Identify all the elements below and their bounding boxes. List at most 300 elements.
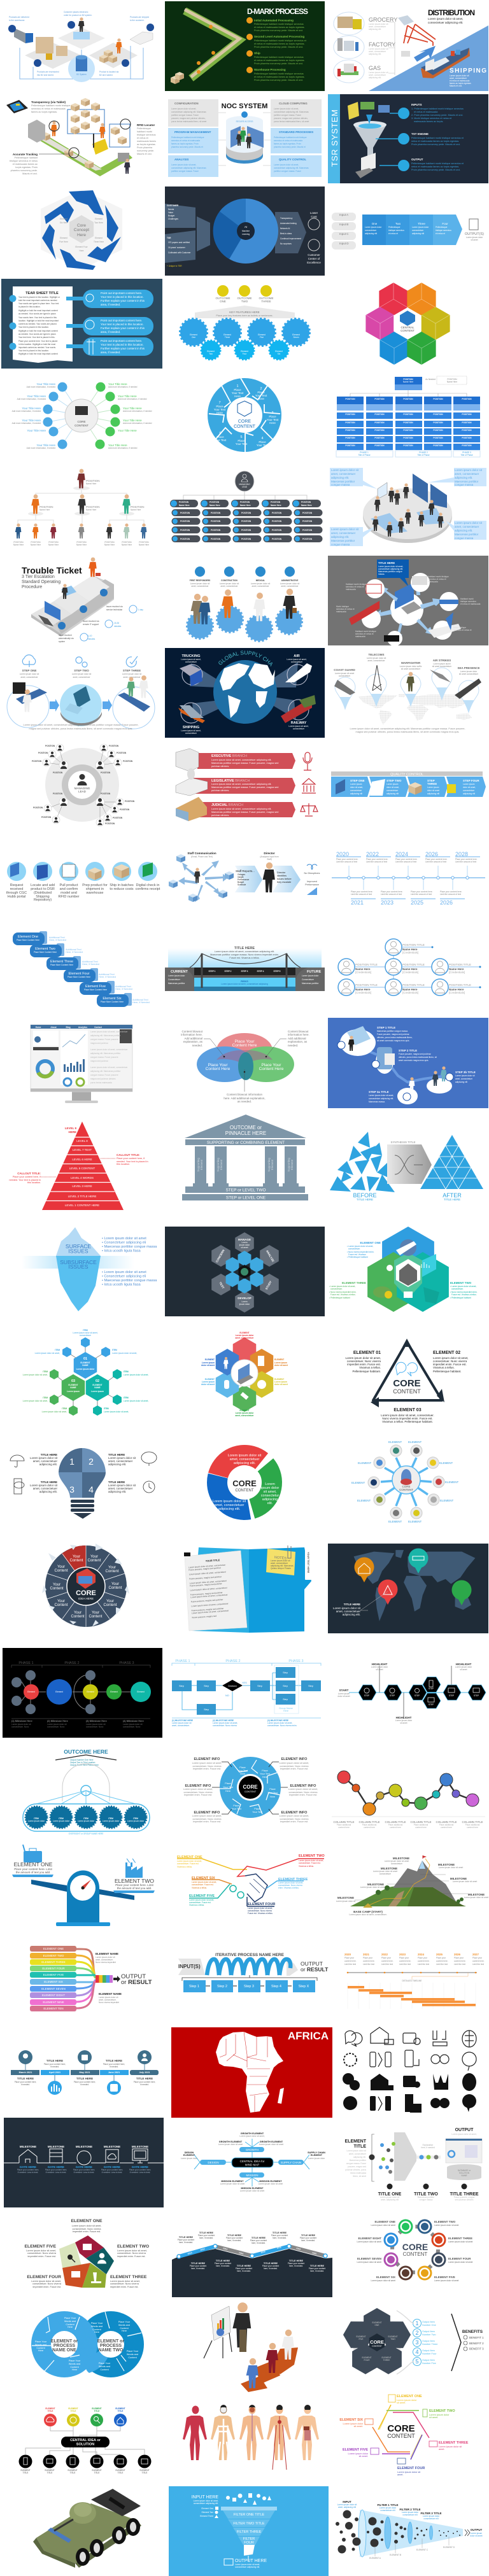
panel: element info ring: Lorem ipsum dolor sit amet, [183,1788,213,1791]
labels: ELEMENT FOUR [397,2467,425,2470]
panel: filter cone: Lorem ipsum [471,2532,483,2535]
panel: distribution: GAS [369,65,381,71]
panel: connected vehicles: senectus et netus et [428,578,446,581]
panel: element info ring: Here [240,1773,245,1775]
panel: tear sheet: Your words are typed in place here. Your text [18,302,59,305]
panel: balance scale: Place your content here. Limit [14,1868,53,1871]
labels: dolor sit amet [274,1364,288,1367]
panel: handshake: Vivamus a tellus. [299,1865,314,1868]
panel: iterative process: Step 2 [217,1985,227,1988]
panel: seven step cycle: 5 [240,435,243,439]
panel: bridge: CURRENT [171,970,188,974]
panel: central idea tree: ELEMENT [20,2469,31,2472]
panel: radial elements [351,1440,459,1523]
panel: inputs to outputs: tristique senectus [436,229,451,232]
panel: icon set [343,2027,476,2113]
panel: control room: Lorem ipsum dolor sit [455,521,483,524]
panel: blue funnel: OUTPUT HERE [235,2559,267,2563]
labels: Lorem ipsum [202,1381,215,1383]
panel: gantt timeline: 2027 [472,1953,479,1956]
panel: six step product flow: and confirm [60,887,78,891]
panel: hexagon elements: • Nunc viverra imperdiet enim. [329,1291,357,1293]
panel: element filter to output: DATABASE or [458,2169,471,2172]
panel: AI machine learning: Network AI [280,227,290,230]
panel: handshake: Vivamus a tellus. [189,1904,204,1906]
panel: core wheel: Content [69,1559,83,1563]
panel: pentagon elements: consectetuer. Nunc viverra [27,2252,57,2255]
callout text: pharetra nonummy pede. [11,169,38,172]
panel: dark milestones: Place your content here, [45,2169,67,2171]
labels: Lorem ipsum dolor [397,2399,417,2402]
panel: column circles path: COLUMN TITLE [334,1820,354,1824]
panel: phase org chart: Title of Phase [358,454,371,456]
step text: STEP 3a TITLE [369,1090,389,1094]
panel: element info ring: imperdiet enim. Fusce est. [280,1820,308,1823]
panel: inputs to outputs: Three [418,222,425,225]
panel: six stepped pills: Place More Content Here [84,989,107,991]
panel: element info ring: Here [270,1796,275,1798]
panel: inputs to outputs: Input A [339,213,348,216]
panel: outcome gears: Output Number One Here [70,1759,94,1761]
panel: star benefits: 5 [415,2358,419,2365]
panel: hex tree: Lorem ipsum dolor sit amet, [112,1352,137,1355]
centre hex [393,307,422,339]
levels: LEVEL 1 CONTENT HERE [65,1204,99,1207]
panel: trouble ticket: remote IT support [83,623,99,626]
panel: mountain milestones: Lorem ipsum dolor sit amet [453,1880,477,1883]
panel: phase org chart: POSITION [345,444,355,447]
panel: pill org chart: POSITION [271,501,281,503]
panel: pill org chart: POSITION [180,529,190,531]
panel: three step care: Lorem ipsum dolor sit [122,673,141,675]
panel: element info ring: Lorem ipsum dolor sit amet, [288,1788,318,1791]
cones [190,662,298,721]
colored nodes [24,1684,39,1700]
panel: six stepped pills: Here, If Needed [132,1001,150,1004]
panel: gantt timeline: 2021 [363,1953,370,1956]
panel: gears and outcomes: Element [292,334,300,336]
panel: blue funnel: FILTER ONE TITLE [234,2513,265,2517]
panel: six step product flow: warehouse [86,891,103,895]
panel: people org chart: POSITION [48,541,59,544]
panel: element filter to output [345,2128,482,2201]
panel: pill org chart: Name Here [179,504,190,507]
panel: NOC system: pharetra nonummy pede. Mauris et [171,146,203,148]
panel: core wheel: Your [53,1583,60,1587]
panel: bridge: Fusce est. Vivamus a tellus. [229,957,260,959]
panel: star benefits: ELEMENT [362,2356,372,2359]
panel: tear sheet: TEAR SHEET TITLE [25,292,59,295]
panel: hexagon elements: consectetuer. [330,1288,343,1290]
panel: mind map: ELEMENT [183,2154,195,2157]
panel: ten elements to output: Nunc viverra imperdiet [99,2001,119,2004]
panel: six step product flow: shipment in [86,887,104,891]
panel: blue steps: consectetuer adipiscing elit. [369,1097,393,1100]
panel: phase org chart: POSITION [433,437,443,439]
panel: tear sheet: as needed. Your words are typed in place. [18,333,56,335]
info labels [185,1757,316,1815]
panel: inputs to outputs: consectetuer [412,229,424,232]
panel: responders: Lorem ipsum dolor sit [251,582,270,585]
panel: core wheel: Your [90,1555,98,1559]
labels: OUTPUT [471,2528,483,2531]
panel: iterative process: Step 4 [271,1985,281,1988]
solid icons [343,2073,476,2113]
labels: ELEMENT FOUR [248,1903,275,1906]
spring coils [207,1959,290,1975]
panel: distribution: Lorem ipsum dolor sit [369,23,388,25]
labels: Lorem ipsum [274,1362,287,1364]
panel: staff communication: Schedule [237,883,246,886]
panel: tear sheet: important content as needed. Your words. [18,346,56,349]
phases [336,451,480,457]
core label: CONTENT [234,425,256,429]
panel: element info ring: Your Text [267,1792,278,1794]
panel: inputs to outputs: consectetuer [365,229,377,232]
panel: managing lead network: POSITION [113,817,123,819]
panel: gantt timeline: content here. [363,1960,375,1962]
labels [201,1332,288,1417]
panel: control room: Maecenas porttitor [331,480,355,483]
panel: hexagon strategy: MANAGE [238,1238,251,1241]
panel: dark milestones: Place your content here, [17,2169,39,2171]
panel: pentagon elements: consectetuer. Nunc viverra [117,2252,146,2255]
panel: central idea tree: ELEMENT [92,2407,102,2410]
element labels: ELEMENT EIGHT [358,2237,381,2240]
panel: process flow: consectetuer. Nunc viverra enim. [267,1724,297,1727]
panel: world pins: AIR STRIKES [433,659,451,662]
panel: pill org chart: POSITION [241,529,252,531]
labels: ELEMENT [239,1409,250,1412]
labels [177,1854,325,1906]
panel: pentagon elements: Lorem ipsum dolor sit amet, [26,2249,56,2252]
panel: month timeline: TITLE HERE [136,2077,153,2080]
panel: black phase diagram: PHASE 1 [18,1661,34,1665]
panel: element filter to output: Lorem ipsum dolor sit [347,2150,366,2152]
labels: ELEMENT TWO [115,1878,154,1884]
panel: pyramid: Place your content here, if [13,1176,41,1178]
panel: mountain timeline: here, if needed. [191,2267,205,2270]
panel: infinity process: Content [70,2366,80,2368]
AI wheel: Machine [242,230,250,232]
panel: gantt timeline: Place your [344,1957,355,1959]
panel: phase org chart: PHASE 3 [462,451,471,454]
panel: NOC system: Lorem ipsum dolor sit amet, [274,164,299,166]
panel: people org chart: POSITION [139,541,149,544]
panel: zig timeline: Place your content here. [336,858,358,861]
panel: star benefits: Output Item [422,2349,435,2352]
panel: month timeline: Place your content here, [44,2063,66,2066]
panel: folder: Lorem ipsum dolor sit [271,1559,290,1562]
panel: mountain timeline: here, if needed. [227,2239,241,2242]
panel: six stepped pills: Element Two [35,947,55,951]
panel: handshake: Lorem ipsum dolor sit amet, [278,1882,303,1884]
panel: element filter to output: Lorem ipsum dolor sit amet, [451,2133,477,2136]
panel: dark world map: Lorem ipsum dolor sit [333,1607,361,1610]
panel: process flow: PHASE 3 [288,1659,304,1663]
section headings [411,103,429,161]
info labels: ELEMENT INFO [185,1784,211,1788]
panel: TSR system: Pellentesque habitant morbi tristique senectus et [411,137,464,139]
panel: hexagon strategy [165,1227,325,1316]
panel: six stepped pills: Element Five [85,985,106,989]
panel: puzzle bulb: Lorem ipsum dolor sit [30,1456,58,1460]
panel: temple: Supporting [197,1158,200,1172]
panel: AI machine learning: CUSTOMER [167,204,179,207]
arrows star [178,861,228,902]
panel: black hex path: HIGHLIGHT [372,1663,388,1666]
panel: distribution: Lorem ipsum dolor sit [369,71,388,74]
process steps: et netus et malesuada fames ac turpis egestas. [254,76,305,78]
panel: gantt timeline: Place your [436,1957,446,1959]
panel: connected vehicles: malesuada [355,635,365,638]
panel: column circles path: content here [364,1826,375,1829]
panel: six step product flow: Hubb portal [8,895,25,899]
panel: circular org members: [Credentials] [355,991,371,994]
panel: blue funnel: Element Two [202,2511,213,2514]
panel: inputs to outputs: Lorem ipsum dolor [412,226,429,229]
panel: hexagon elements: • Nunc viverra imperdiet enim. [450,1291,478,1293]
panel: NOC system: porttitor congue massa. Fusce [171,114,199,116]
panel: element info ring: imperdiet enim. Fusce est. [280,1768,308,1770]
panel: tear sheet: Point out important content here. [101,292,142,295]
panel: month timeline: TITLE HERE [17,2077,34,2080]
panel: core wheel: Content [89,1615,103,1619]
panel: triangle cycle: Pellentesque habitant. [433,1370,462,1373]
panel: dashboard monitor: adipiscing elit. Maecenas porttitor [90,1052,121,1055]
buildings [176,749,208,821]
panel: trouble ticket: 1-10 [88,635,92,637]
panel: venn diagram: information here. [288,1033,309,1036]
process steps: Proin pharetra nonummy pede. Mauris et orci. [254,46,303,48]
panel: gantt timeline: 2023 [399,1953,406,1956]
labels: FILTER 1 TITLE [378,2503,398,2507]
panel: black hex path: HIGHLIGHT [396,1716,412,1719]
panel: infinity process: Place Your [118,2321,131,2323]
panel: element filter to output: lectus malesuada [350,2172,366,2174]
panel: tear sheet: Your text is placed in this location. [101,323,144,326]
panel: folder: adipiscing elit. Maecenas [271,1565,294,1567]
panel: mountain timeline: here, if needed. [301,2239,315,2242]
panel: balance scale: the amount of text you add. [16,1871,50,1874]
panel: world pins: consectetuer [339,675,351,677]
panel: core wheel: Your [73,1555,80,1559]
panel: element filter to output: SOLUTION [459,2172,470,2174]
labels: Lorem ipsum dolor [348,2453,369,2455]
panel: distribution: et netus et malesuada [450,80,470,82]
panel: infinity process: Place Your [99,2362,111,2365]
panel: pill org chart: POSITION [211,538,221,540]
panel: central idea tree: ELEMENT [115,2469,125,2472]
panel: temple [182,1115,308,1200]
panel: inputs to outputs: Input B [339,223,348,226]
panel: pentagon elements: imperdiet enim. Fusce est. [110,2286,139,2288]
panel: control room: amet, consectetuer [455,525,479,528]
process steps: et netus et malesuada fames ac turpis egestas. [254,43,305,45]
panel: folder: YOUR TITLE [206,1559,220,1563]
panel: circular org members: Name Here [402,988,418,991]
panel: core concept hexagonal cycle: Six Here [60,222,67,224]
step captions [9,11,149,76]
panel: hexagon elements [329,1227,478,1312]
panel: gears and outcomes: Element [241,350,248,353]
panel: mind map: CENTRAL IDEA for [240,2160,265,2163]
milestones: MILESTONE [438,1863,455,1866]
panel: tear sheet: Point out important content here. [101,319,142,322]
callout text: Proin pharetra [137,146,153,149]
labels: CORE [387,2423,415,2434]
panel: infinity process [31,2311,144,2377]
particles [336,2510,460,2554]
panel: element info ring: Your Text [237,1770,248,1772]
panel: hexagon elements: • Lorem ipsum dolor sit amet, [329,1285,355,1288]
panel: hub with twelve items: Add more information, if needed [12,410,41,412]
panel: eight element ring: CONTENT [403,2251,427,2257]
panel: handshake: Lorem ipsum dolor sit amet, [189,1899,214,1901]
vehicles [362,573,458,646]
panel: inputs to outputs: Pellentesque [436,226,448,229]
panel: tear sheet: area, if needed. [101,303,120,306]
panel: phase org chart: POSITION [403,437,413,439]
output [224,2559,233,2565]
panel: world pins: Lorem ipsum dolor [460,670,478,673]
panel: phase org chart: POSITION [374,398,385,400]
panel: zig timeline: 2021 [351,899,364,906]
element labels: NAME TWO [99,2348,124,2353]
panel: gantt timeline [344,1953,485,2009]
panel: quality control: adipiscing elit [463,792,475,795]
panel: mind map: MISSION [246,2174,259,2177]
panel: hub with twelve items: Add more information, if needed [108,386,138,388]
process steps: et netus et malesuada fames ac turpis egestas. [254,59,305,62]
columns [337,397,480,404]
panel: gantt timeline: 2026 [454,1953,461,1956]
panel: pentagon elements: consectetuer. Nunc viverra [73,2228,101,2230]
title: Trouble Ticket [22,565,82,575]
panel: managing lead network: POSITION [32,760,42,763]
panel: element info ring: consectetuer. Nunc viverra [193,1818,222,1820]
step captions: B2 System [76,73,87,76]
database icon [68,55,95,82]
panel: star benefits: FIVE [358,2338,364,2340]
process steps: Proin pharetra nonummy pede. Mauris et orci. [254,62,303,65]
panel: three branches: Lorem ipsum dolor sit amet, consectetuer adipiscing elit. [211,759,272,761]
panel: venn diagram: explanation, as [183,1040,203,1043]
step captions: Products are delivered [9,16,29,18]
panel: hex tree: Lorem ipsum dolor sit amet, [23,1400,48,1402]
panel: hexagon elements: • Lorem ipsum dolor sit amet, [347,1245,373,1248]
labels [343,2500,483,2531]
panel: global supply chain: consectetuer [291,661,303,663]
panel: mountain milestones: Lorem ipsum dolor sit amet [360,1886,385,1889]
panel: month timeline: if needed. [140,2083,149,2086]
panel: phase org chart: POSITION [433,429,443,432]
core: CONTENT [236,1489,254,1493]
panel: month timeline: Place your content here, [134,2081,155,2083]
below water [56,1256,101,1311]
panel: puzzle bulb: amet, consectetuer [108,1487,133,1490]
panel: venn diagram: Add additional [288,1037,306,1040]
panel: NOC system: Lorem ipsum dolor sit amet, [171,164,196,166]
panel: phase org chart: POSITION [462,398,472,400]
panel: phase org chart: POSITION [403,398,413,400]
panel: venn diagram: Content blowout [288,1030,309,1033]
panel: gantt timeline: Limit the text [399,1963,411,1966]
circles [7,686,49,728]
panel: dashboard monitor: Contact [94,1026,103,1029]
core label [234,401,256,429]
panel: dark milestones: MILESTONE [20,2145,36,2148]
panel: process flow: Decision [228,1685,237,1687]
panel: gantt timeline: Limit the text [381,1963,393,1966]
panel: managing lead network: POSITION [38,752,48,754]
panel: world pins: Lorem ipsum dolor sit [367,657,386,659]
panel: hub with twelve items: Add more information, if needed [108,447,138,449]
panel: zig timeline: Place your content here. [366,858,388,861]
panel: pill org chart: POSITION [180,520,190,523]
box headings: PROGRAM MANAGEMENT [174,130,211,134]
panel: ten elements to output: ELEMENT NAME [99,1992,122,1995]
panel: six step product flow: Request [10,883,24,887]
panel: pill org chart: POSITION [211,512,221,514]
swirl text: amet, consectetuer [215,1503,244,1507]
panel: phase org chart: POSITION [345,421,355,424]
panel: control room: amet, consectetuer [331,472,356,475]
panel: outcome gears: ITEM [83,1817,89,1820]
panel: phase org chart: POSITION [462,444,472,447]
panel: outcome gears: OVERSIGHT or GROUP NAME HERE [69,1833,103,1835]
panel: armored vehicle [33,2489,141,2568]
panel: three branches [176,749,318,821]
panel: hexagon strategy: TEST [218,1281,225,1290]
panel: central idea tree: TITLE [118,2410,123,2412]
panel: mountain timeline: here, if needed. [237,2270,251,2272]
callout text: RFID Locator [137,123,155,127]
panel: mountain timeline: TITLE HERE [252,2237,266,2239]
title: D-MARK PROCESS [247,7,308,16]
panel: connected vehicles: Habitant morbi tristique [346,583,367,586]
title: NOC SYSTEM [222,102,267,110]
panel: handshake: Lorem ipsum dolor sit amet, [299,1859,323,1862]
panel: star benefits: Number Three [422,2343,437,2346]
panel: gantt timeline: DETAILED TIMELINE [402,1980,422,1982]
paper [13,286,73,363]
panel: ten elements to output: ELEMENT TEN [43,2007,64,2010]
panel: circular org members: Name Here [449,968,464,971]
panel: people org chart: Name Here [131,509,141,511]
panel: seven step cycle [209,378,280,452]
panel: ten elements to output: OUTPUT [121,1973,146,1980]
panel: hub with twelve items: Your Title Here [123,419,142,422]
panel: black phase diagram: PHASE 2 [64,1661,80,1665]
panel: hex tree: ITEM [62,1407,67,1410]
panel: blue steps: Maecenas massa. [369,1101,385,1103]
panel: mountain timeline: Place your content [309,2267,325,2270]
panel: bridge: Lorem ipsum dolor [168,975,185,977]
panel: eight element ring: Lorem ipsum dolor sit amet [448,2241,473,2243]
panel: dark milestones: MILESTONE [104,2145,120,2148]
panel: process flow: Step [204,1708,209,1711]
panel: venn diagram: Content blowout [181,1030,203,1033]
panel: black phase diagram: Element [55,1691,63,1693]
panel: black phase diagram: consectetuer. Nunc [123,1726,141,1728]
panel: inputs to outputs [332,213,484,250]
panel: quality control: dolor sit amet, [463,786,476,789]
panel: hexagon strategy: ipsum dolor [239,1303,250,1306]
map [354,1550,475,1621]
element text: ELEMENT 01 [353,1351,381,1355]
core [396,1362,417,1376]
